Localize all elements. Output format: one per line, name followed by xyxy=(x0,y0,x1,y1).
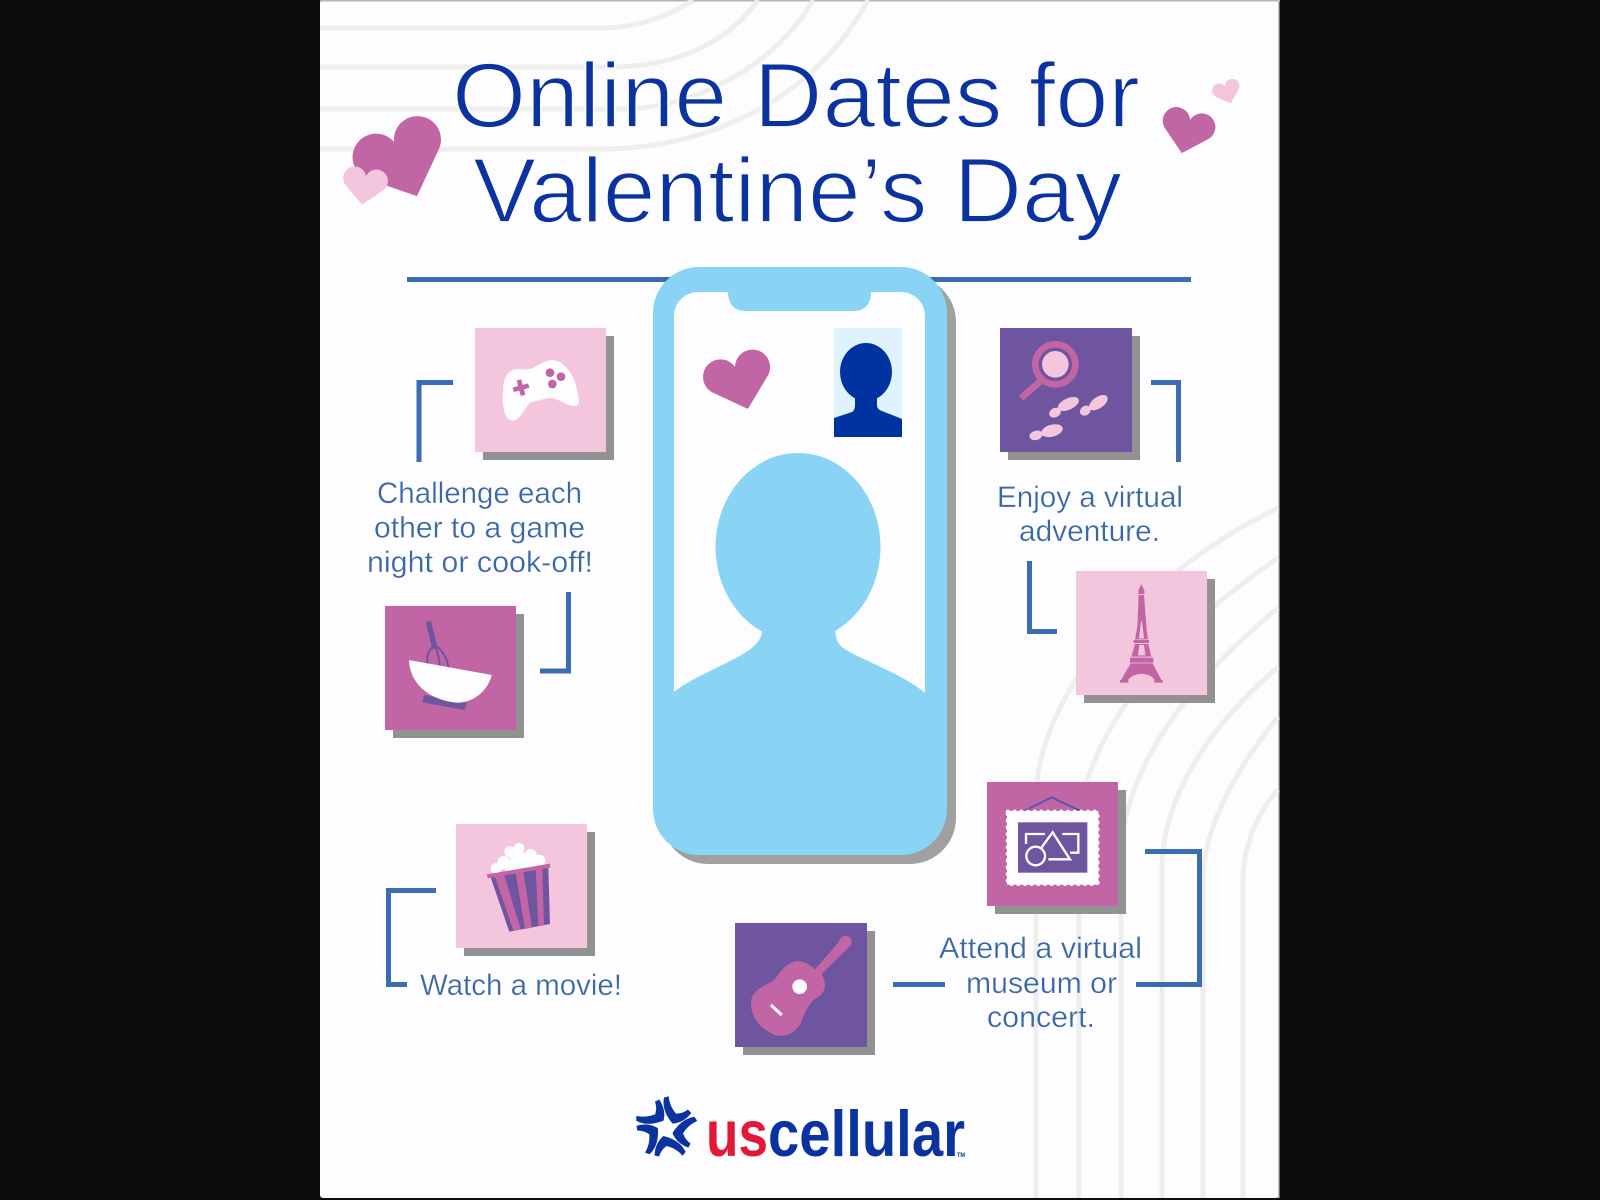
bracket: adventure top xyxy=(1151,382,1178,462)
logo wordmark: TM xyxy=(957,1153,965,1159)
bracket: adventure bottom xyxy=(1030,561,1057,632)
self view thumbnail xyxy=(834,328,902,437)
phone heart xyxy=(699,345,781,419)
caption: adventure: Enjoy a virtual xyxy=(997,481,1183,514)
connector: guitar xyxy=(893,982,945,987)
activity: guitar xyxy=(735,923,875,1055)
caption: game night: other to a game xyxy=(374,512,585,544)
phone xyxy=(653,267,956,864)
caption: game night xyxy=(367,477,593,579)
activity: Eiffel tower xyxy=(1076,571,1215,703)
title: Online Dates for xyxy=(452,45,1140,147)
bracket: museum xyxy=(1136,852,1200,984)
bracket: game xyxy=(419,382,453,462)
white panel xyxy=(320,0,1279,1198)
caption: adventure: adventure. xyxy=(1019,515,1160,548)
bracket: cook-off xyxy=(540,592,568,671)
caption: movie: Watch a movie! xyxy=(420,969,622,1002)
title: Valentine’s Day xyxy=(473,140,1122,242)
activity: magnifier and footprints xyxy=(1000,328,1140,460)
logo mark xyxy=(627,1094,704,1169)
caption: museum or concert: Attend a virtual xyxy=(939,932,1142,965)
logo wordmark xyxy=(706,1097,965,1170)
activity: whisk and bowl xyxy=(385,606,524,738)
bracket: movie xyxy=(388,890,436,984)
caption: museum or concert: museum or xyxy=(966,967,1117,1000)
remote person silhouette xyxy=(674,453,925,740)
logo wordmark: cellular xyxy=(768,1097,965,1170)
hearts: top right xyxy=(1156,77,1244,160)
logo: UScellular xyxy=(627,1094,965,1170)
activity: game controller xyxy=(475,328,614,460)
caption: game night: night or cook-off! xyxy=(367,546,593,579)
activity: framed art xyxy=(987,782,1126,914)
hearts: top left xyxy=(340,109,459,214)
caption: adventure xyxy=(997,481,1183,548)
logo wordmark: us xyxy=(706,1097,768,1170)
phone screen xyxy=(674,292,925,740)
caption: game night: Challenge each xyxy=(377,477,582,510)
title xyxy=(452,45,1140,242)
caption: museum or concert xyxy=(939,932,1142,1034)
caption: museum or concert: concert. xyxy=(987,1001,1095,1034)
activity: popcorn xyxy=(456,824,595,956)
